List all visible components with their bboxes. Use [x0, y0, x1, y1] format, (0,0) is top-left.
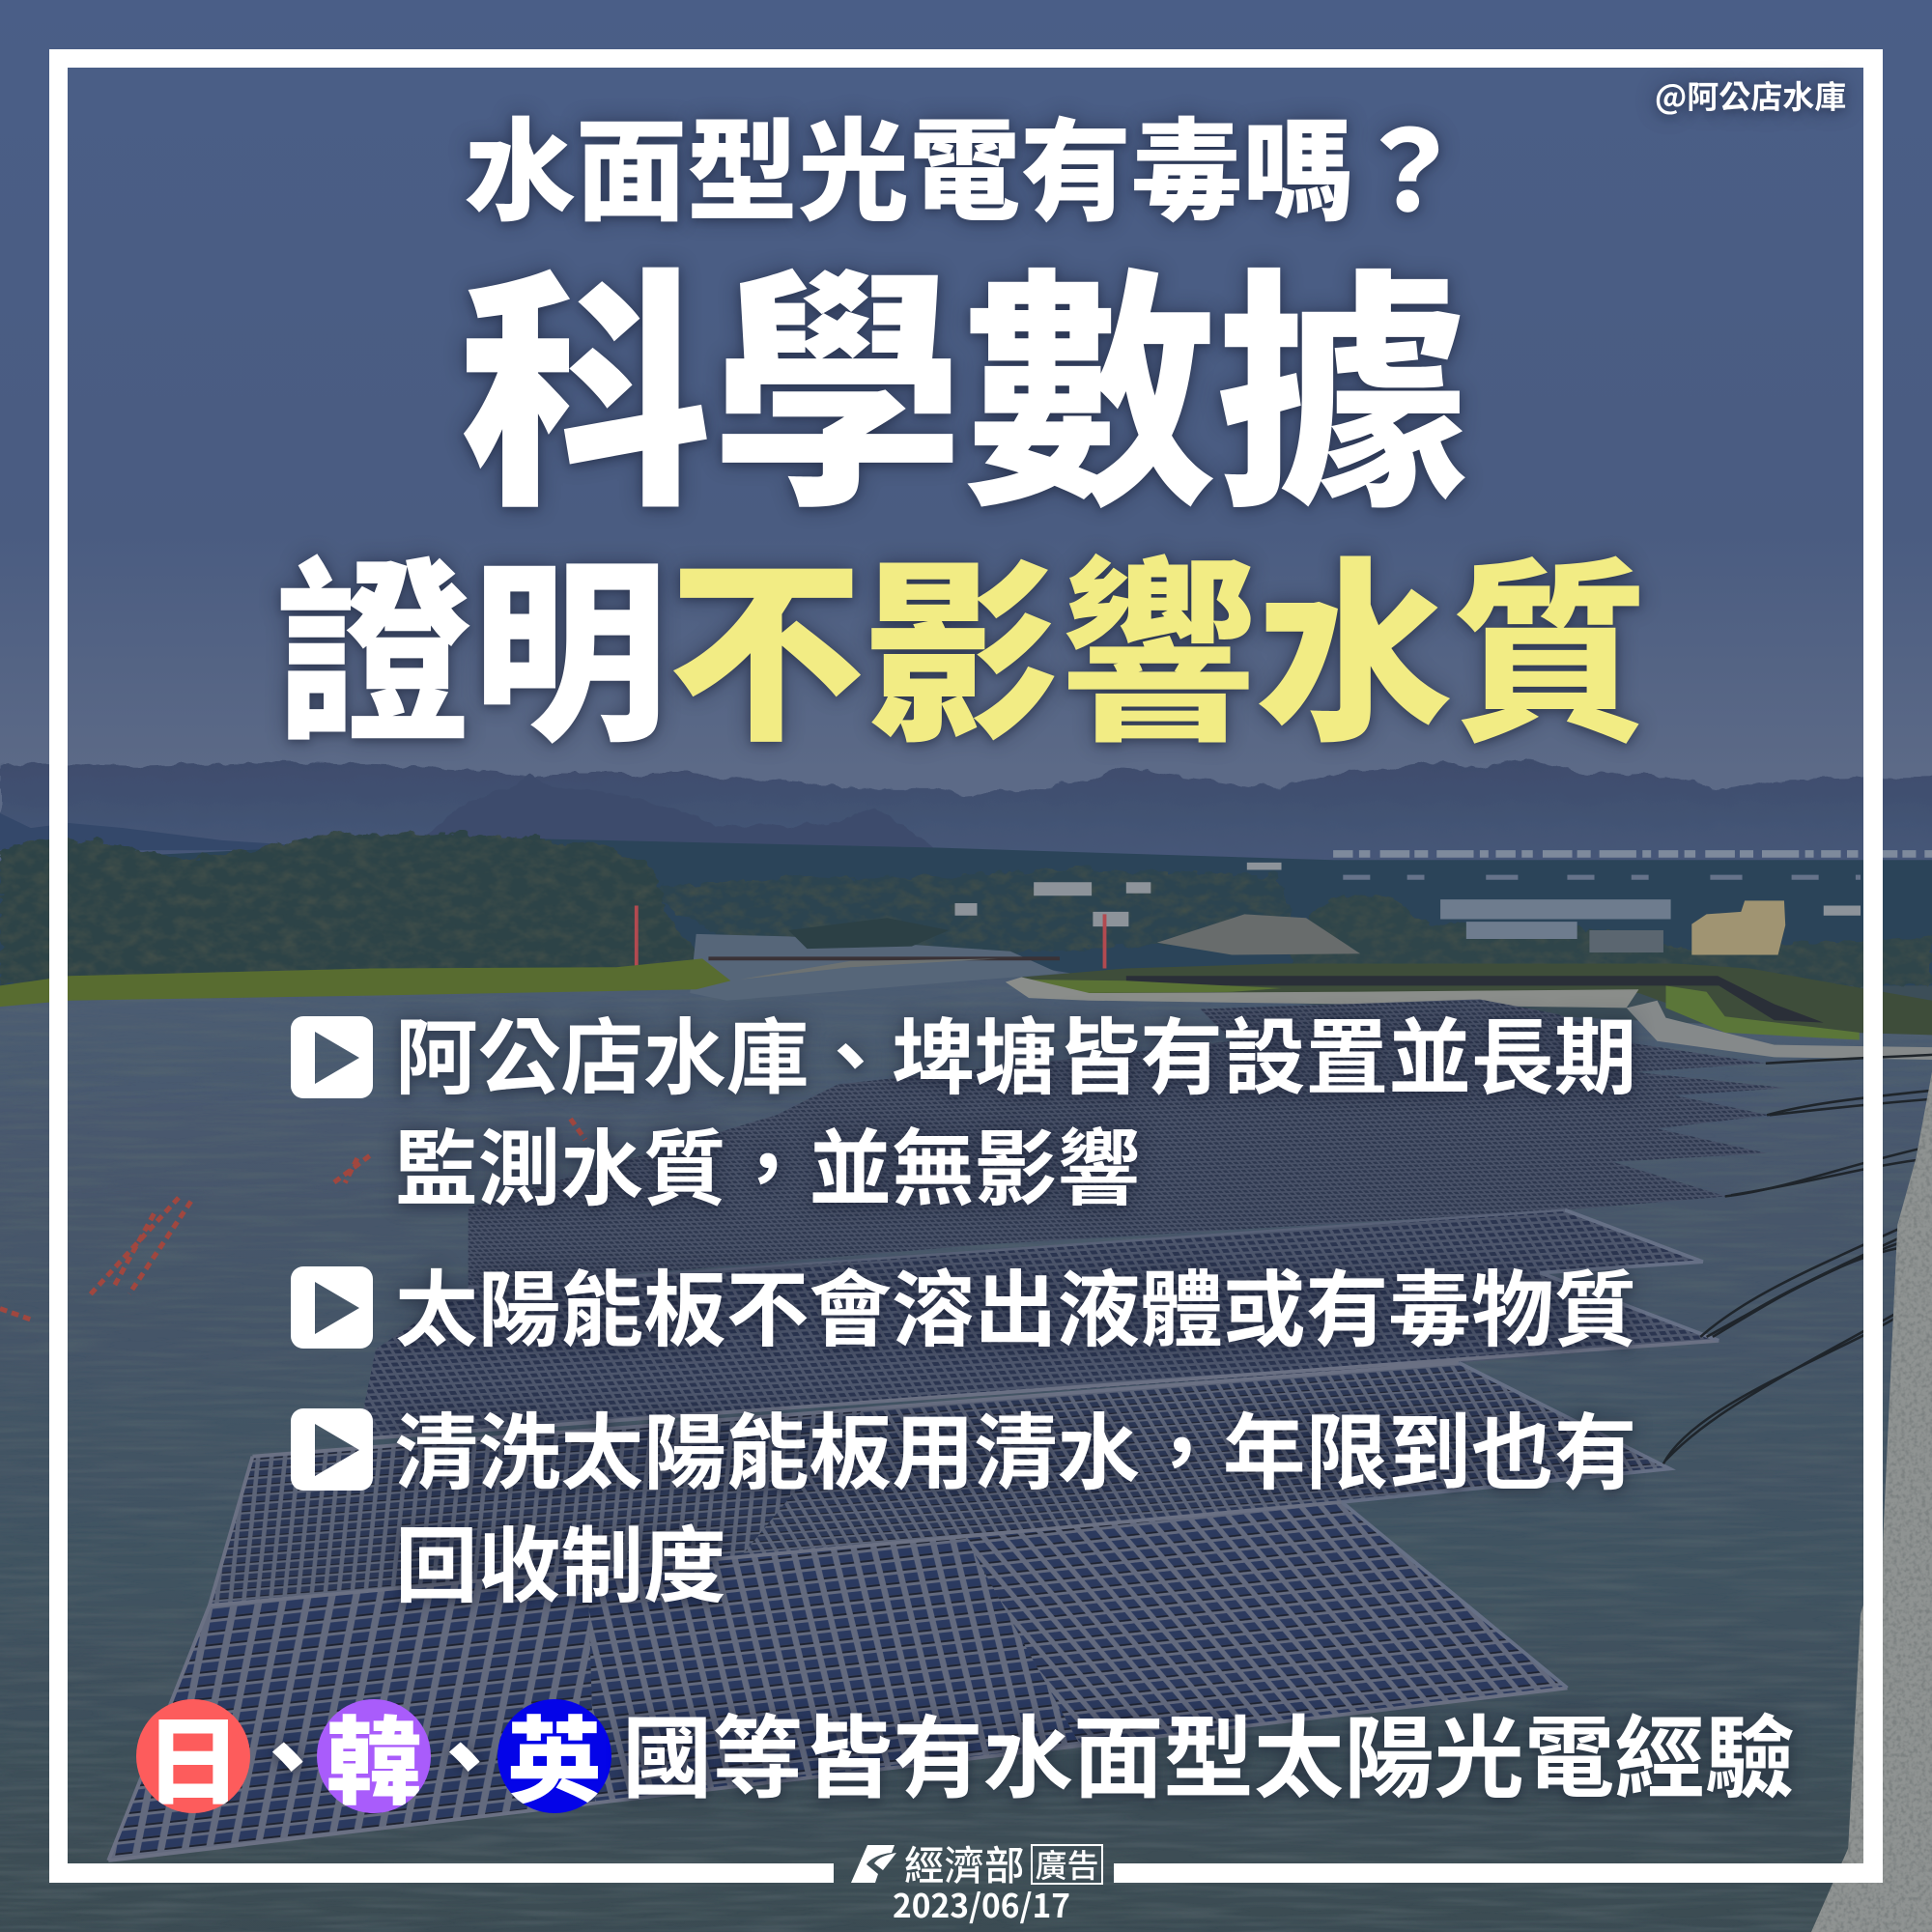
bullet 1	[291, 991, 1638, 1222]
source label: @阿公店水庫	[1655, 71, 1846, 118]
bullet 3 text: 清洗太陽能板用清水，年限到也有	[395, 1386, 1636, 1506]
sky	[0, 0, 1932, 887]
date: 2023/06/17	[893, 1880, 1070, 1927]
bullet 2	[291, 1243, 1636, 1363]
callout text: 國等皆有水面型太陽光電經驗	[622, 1686, 1795, 1816]
floating solar array	[108, 999, 1786, 1861]
riverbed and buildings	[955, 863, 1861, 955]
title line 1: 水面型光電有毒嗎？	[465, 83, 1464, 243]
distant town and tree line	[0, 838, 1932, 985]
ministry name: 經濟部	[904, 1833, 1025, 1891]
grassy shore, left	[0, 958, 730, 1007]
bullet 3	[291, 1386, 1636, 1619]
red buoys	[0, 1119, 585, 1321]
ad label box: 廣告	[1036, 1840, 1099, 1887]
embankment, right	[1006, 963, 1932, 1060]
icon: play button	[291, 1266, 373, 1349]
icon: ministry logo	[851, 1845, 896, 1883]
separator: 、	[419, 1686, 509, 1816]
bullet 2 text: 太陽能板不會溶出液體或有毒物質	[395, 1243, 1636, 1363]
water	[0, 949, 1932, 1932]
forest, left shore	[0, 831, 708, 985]
separator: 、	[242, 1686, 332, 1816]
title line 3: 證明不影響水質	[275, 497, 1649, 781]
title line 2: 科學數據	[460, 191, 1468, 556]
icon: play button	[291, 1408, 373, 1491]
rocky shoreline, right	[1811, 1072, 1932, 1932]
floating cables	[1663, 1055, 1932, 1463]
callout: countries with floating solar experience	[136, 1686, 1796, 1816]
bullet 1 text: 阿公店水庫、埤塘皆有設置並長期	[395, 991, 1636, 1111]
bullet 1: 監測水質，並無影響	[395, 1102, 1140, 1222]
icon: play button	[291, 1016, 373, 1098]
distant mountains	[0, 759, 1932, 875]
footer: ministry logo and ad label	[851, 1833, 1103, 1891]
bullet 1 text	[394, 991, 1638, 1222]
bullet 3 text	[393, 1386, 1636, 1619]
bullet 3: 回收制度	[395, 1499, 726, 1619]
river channel and island	[635, 906, 1106, 1001]
